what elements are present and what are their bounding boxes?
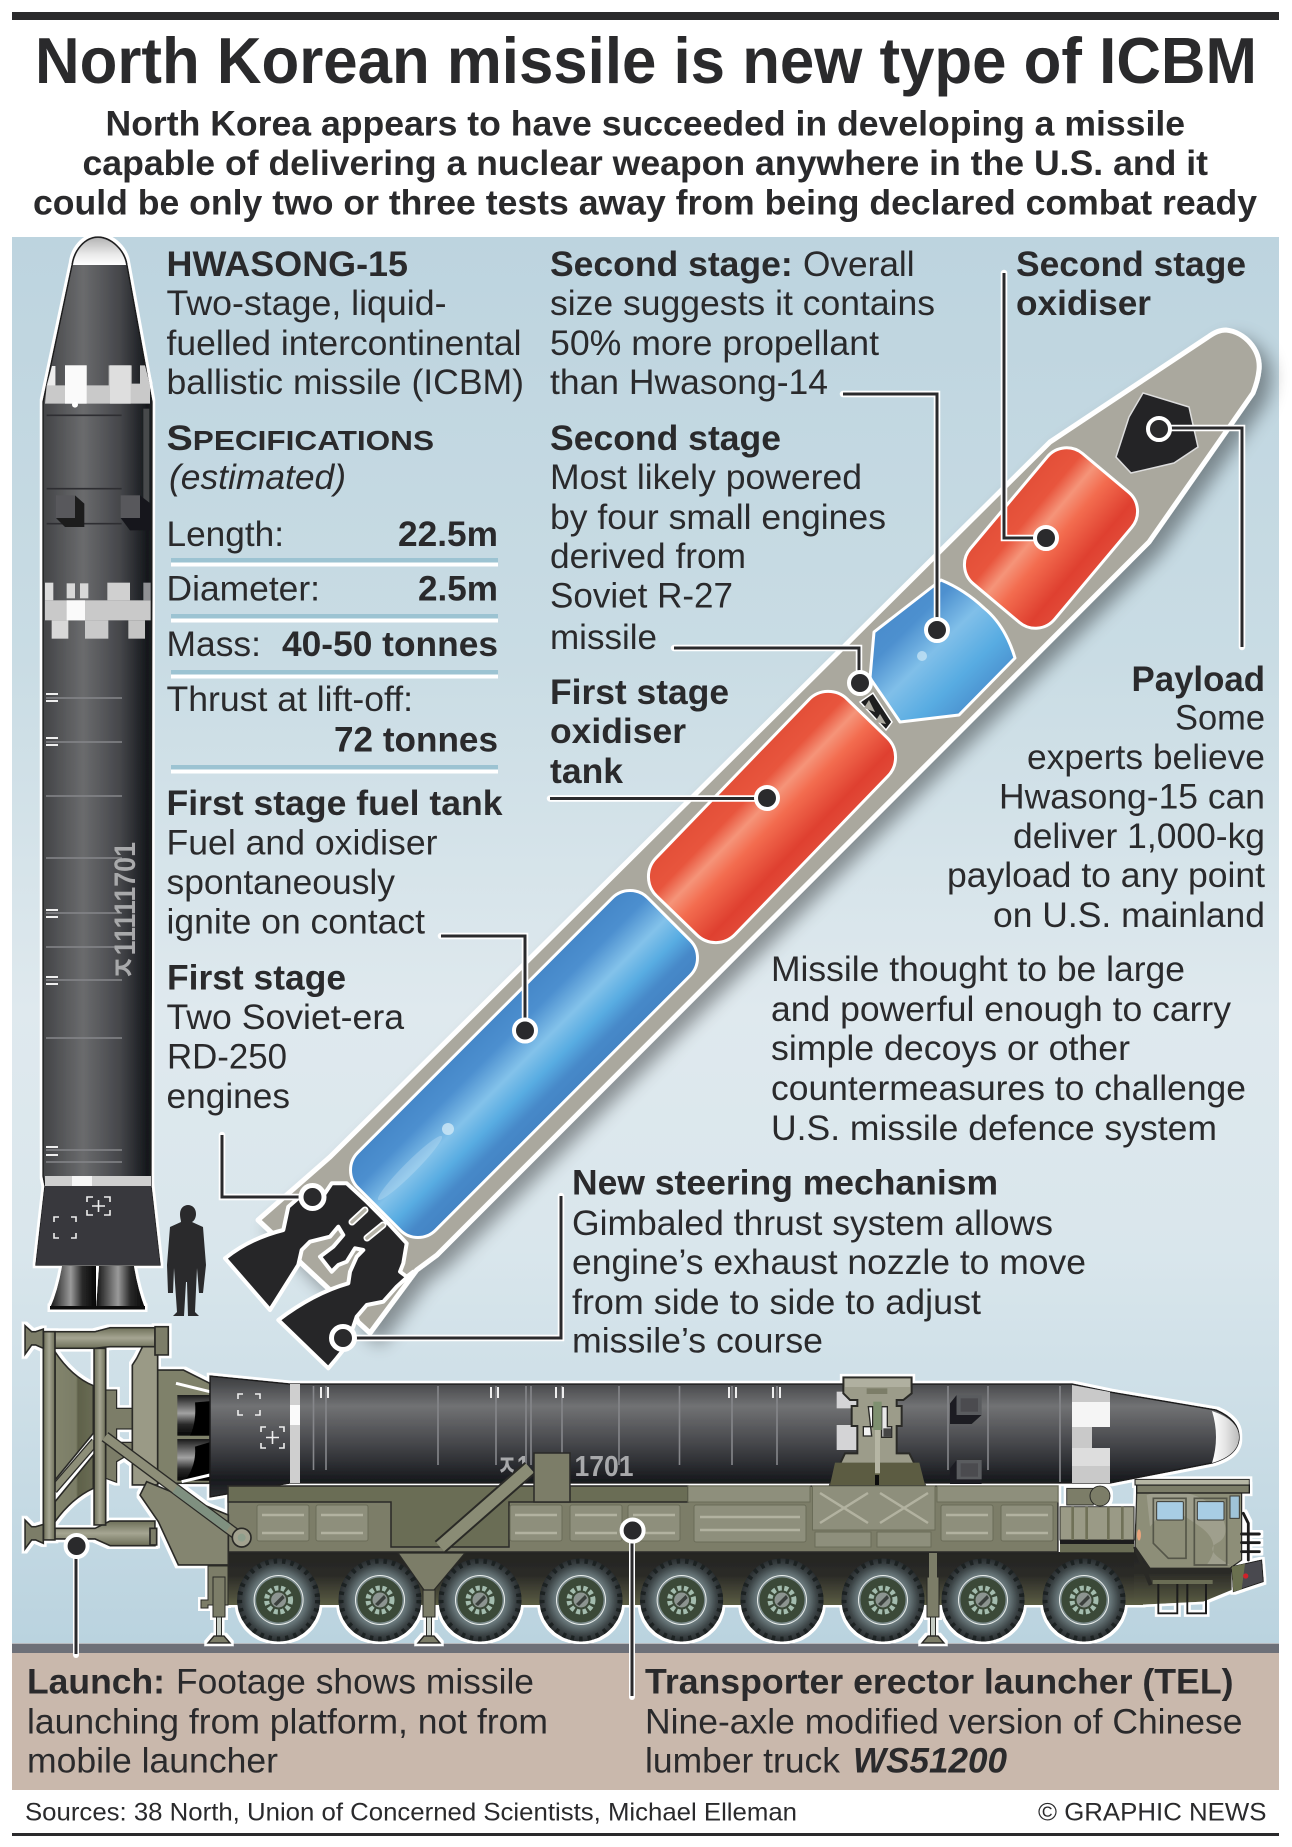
cab windows xyxy=(1157,1496,1239,1520)
right side strip xyxy=(143,409,149,505)
text: first stage xyxy=(166,958,405,1116)
dark deck recess xyxy=(228,1486,688,1547)
interstage band xyxy=(45,583,151,639)
nose cap xyxy=(73,238,126,265)
leader: payload xyxy=(1148,418,1242,647)
text: decoys note: simple decoys or other xyxy=(771,1029,1130,1068)
alignment marks xyxy=(54,1197,110,1238)
rear wedge and ram xyxy=(105,1437,251,1565)
lower block xyxy=(950,1460,982,1484)
text: new steering mechanism: New steering mechanism xyxy=(572,1163,998,1202)
second stage small engines xyxy=(860,693,892,730)
control block left xyxy=(56,495,84,527)
leader: new steering mechanism xyxy=(332,1196,561,1350)
platform mid upright xyxy=(94,1348,106,1525)
text: payload: Some xyxy=(1175,698,1265,737)
text: first stage oxidiser tank: First stage xyxy=(550,673,729,712)
leader: TEL xyxy=(622,1520,644,1697)
platform left upright xyxy=(43,1332,55,1540)
text: second stage engines: derived from xyxy=(550,537,746,576)
text: first stage: RD-250 xyxy=(167,1037,287,1076)
text: decoys note: and powerful enough to carry xyxy=(771,990,1232,1029)
rear chassis step xyxy=(201,1566,228,1608)
leader: first stage fuel tank xyxy=(441,936,536,1042)
panel: illustrated background xyxy=(12,237,1279,1643)
spec: mass: 40-50 tonnes xyxy=(282,625,498,664)
sources: Sources: 38 North, Union of Concerned Scientists, Michael Elleman xyxy=(25,1798,797,1826)
launch platform xyxy=(25,1326,210,1549)
text: TEL caption: Transporter erector launcher (TEL) xyxy=(645,1662,1234,1701)
subtitle xyxy=(33,104,1258,222)
text: launch caption: mobile launcher xyxy=(27,1741,278,1780)
text: first stage fuel tank xyxy=(166,784,503,941)
elevating ram xyxy=(105,1437,242,1538)
text: payload xyxy=(947,660,1265,935)
ground strip xyxy=(12,1644,1279,1653)
text: launch caption: launching from platform, not from xyxy=(27,1702,548,1741)
platform right beam xyxy=(132,1345,158,1485)
text: first stage fuel tank: ignite on contact xyxy=(166,902,425,941)
rocket nozzles xyxy=(50,1266,145,1310)
subtitle: capable of delivering a nuclear weapon anywhere in the U.S. and it xyxy=(82,144,1208,183)
cab lower chassis xyxy=(1134,1547,1232,1605)
text: payload: Payload xyxy=(1132,660,1265,699)
erector strut xyxy=(440,1453,570,1547)
text: first stage oxidiser tank xyxy=(550,673,729,791)
text: payload: experts believe xyxy=(1027,738,1265,777)
white squares behind cradle xyxy=(837,1392,858,1450)
diagonal cutaway missile xyxy=(225,330,1259,1368)
cradle bracket xyxy=(830,1377,925,1485)
base flare xyxy=(36,1186,160,1265)
top rule xyxy=(12,12,1279,20)
spec: mass: Mass: xyxy=(166,625,261,664)
side lamp xyxy=(1137,1529,1141,1541)
serial number horizontal xyxy=(497,1451,634,1483)
text: second stage engines: Most likely powered xyxy=(550,458,862,497)
control block right xyxy=(121,495,151,530)
white base band xyxy=(45,1176,151,1186)
text: new steering mechanism: from side to side to adjust xyxy=(572,1283,981,1322)
spec: thrust: Thrust at lift-off: xyxy=(166,680,413,719)
transporter erector launcher with missile xyxy=(25,1326,1263,1643)
subtitle: could be only two or three tests away from being declared combat ready xyxy=(33,183,1258,222)
text: second stage propellant: Overall xyxy=(803,245,915,284)
cab roof xyxy=(1135,1479,1249,1493)
leader: second stage oxidiser xyxy=(1004,273,1057,549)
spec: thrust xyxy=(166,680,498,759)
missile serial number: ㅈ11111701 xyxy=(109,842,142,980)
spec: thrust: 72 tonnes xyxy=(334,720,498,759)
second stage fuel tank xyxy=(870,580,1015,722)
upper block xyxy=(950,1395,982,1424)
text: first stage: Two Soviet-era xyxy=(166,998,405,1037)
platform connector xyxy=(106,1390,132,1482)
cab front frame xyxy=(1135,1547,1151,1585)
first stage oxidiser tank xyxy=(637,680,907,954)
missile nozzles on launcher xyxy=(176,1383,212,1482)
text: second stage oxidiser: oxidiser xyxy=(1016,284,1151,323)
credit: © GRAPHIC NEWS xyxy=(1038,1798,1266,1826)
chassis xyxy=(208,1552,1143,1605)
text: second stage oxidiser: Second stage xyxy=(1016,245,1246,284)
text: first stage oxidiser tank: oxidiser xyxy=(550,712,686,751)
estimated note: (estimated) xyxy=(169,458,346,497)
white tick marks xyxy=(46,694,58,1155)
white base band horizontal xyxy=(290,1384,300,1483)
text: second stage propellant: Second stage: xyxy=(550,245,793,284)
cab doors xyxy=(1153,1498,1227,1565)
second stage oxidiser tank xyxy=(954,438,1148,638)
tank highlights xyxy=(374,651,927,1204)
cab camouflage xyxy=(1147,1491,1230,1565)
cab grill xyxy=(1242,1513,1259,1560)
support legs xyxy=(208,1553,944,1643)
text: launch caption xyxy=(27,1662,548,1780)
text: first stage: engines xyxy=(166,1077,290,1116)
specifications table xyxy=(166,419,498,774)
truck deck body xyxy=(228,1486,1058,1552)
text: Hwasong-15 description: HWASONG-15 xyxy=(166,245,408,284)
text: decoys note: U.S. missile defence system xyxy=(771,1109,1217,1148)
text: first stage fuel tank: First stage fuel tank xyxy=(166,784,503,823)
platform lower trumpet xyxy=(55,1455,93,1522)
text: Hwasong-15 description: ballistic missile (ICBM) xyxy=(166,363,524,402)
subtitle: North Korea appears to have succeeded in developing a missile xyxy=(106,104,1185,143)
vertical Hwasong-15 missile xyxy=(36,237,160,1310)
body panels xyxy=(257,1486,1058,1547)
text: payload: Hwasong-15 can xyxy=(999,777,1265,816)
text: decoys note: Missile thought to be large xyxy=(771,950,1185,989)
specifications heading: SPECIFICATIONS xyxy=(166,419,434,458)
mid engine section xyxy=(1060,1486,1134,1552)
stage ring lines xyxy=(46,698,122,1162)
text: launch caption: Launch: xyxy=(27,1662,165,1701)
bottom rule xyxy=(12,1833,1279,1836)
engine plumbing slots xyxy=(352,1210,383,1238)
missile nose cap xyxy=(1212,1411,1239,1463)
platform rear box xyxy=(158,1370,210,1483)
platform end caps xyxy=(25,1326,168,1549)
leader: second stage propellant xyxy=(843,394,948,641)
spec: length: 22.5m xyxy=(398,515,498,554)
spec: length: Length: xyxy=(166,515,284,554)
missile control blocks horizontal xyxy=(830,1377,982,1485)
text: TEL caption: lumber truck xyxy=(645,1741,840,1780)
text: TEL caption xyxy=(645,1662,1242,1780)
platform cross struts xyxy=(53,1442,95,1490)
human scale figure xyxy=(167,1205,206,1316)
text: launch caption: Footage shows missile xyxy=(176,1662,534,1701)
truck cabin and engine section xyxy=(1060,1479,1263,1613)
text: new steering mechanism: engine’s exhaust nozzle to move xyxy=(572,1243,1086,1282)
text: first stage fuel tank: spontaneously xyxy=(166,863,395,902)
text: second stage propellant: 50% more propellant xyxy=(550,324,879,363)
rear wedge xyxy=(140,1482,228,1565)
spec: diameter: 2.5m xyxy=(418,569,498,608)
text: new steering mechanism: missile’s course xyxy=(572,1321,823,1360)
text: second stage propellant: than Hwasong-14 xyxy=(550,363,828,402)
leader: first stage engines xyxy=(222,1135,324,1208)
spec: mass xyxy=(166,625,498,664)
serial number horizontal: ㅈ1 xyxy=(497,1451,529,1483)
spec: diameter: Diameter: xyxy=(166,569,320,608)
missile body xyxy=(36,237,160,1265)
text: second stage engines xyxy=(550,419,886,657)
platform top bar xyxy=(43,1328,155,1348)
text: first stage: First stage xyxy=(167,958,346,997)
missile nose band xyxy=(1072,1385,1110,1483)
front bumper xyxy=(1232,1560,1263,1592)
title: North Korean missile is new type of ICBM xyxy=(35,24,1257,97)
cab body xyxy=(1135,1493,1242,1568)
platform trumpet plate xyxy=(55,1352,93,1480)
text: second stage oxidiser xyxy=(1016,245,1246,323)
text: Hwasong-15 description: Two-stage, liquid- xyxy=(166,284,446,323)
platform bottom bar xyxy=(43,1521,155,1546)
alignment marks horizontal xyxy=(238,1394,284,1448)
spec: length xyxy=(166,515,498,554)
nose band xyxy=(45,365,150,408)
missile body horizontal xyxy=(210,1376,1239,1497)
text: payload: on U.S. mainland xyxy=(993,896,1265,935)
cab steps xyxy=(1153,1580,1213,1613)
text: decoys note: countermeasures to challenge xyxy=(771,1069,1246,1108)
ring lines upper xyxy=(47,415,122,524)
text: second stage propellant: size suggests it contains xyxy=(550,284,935,323)
panel: bottom caption band xyxy=(12,1653,1279,1790)
text: first stage fuel tank: Fuel and oxidiser xyxy=(166,823,438,862)
first stage engines xyxy=(225,1183,413,1368)
text: second stage propellant xyxy=(550,245,935,402)
text: Hwasong-15 description: fuelled intercontinental xyxy=(166,324,522,363)
leader: second stage engines xyxy=(674,648,871,694)
text: decoys note xyxy=(771,950,1246,1148)
leader: launch xyxy=(66,1535,88,1655)
payload warhead xyxy=(1116,393,1198,473)
upper stage details, zoom-coordinate group xyxy=(45,365,151,639)
text: payload: deliver 1,000-kg xyxy=(1013,817,1265,856)
text: new steering mechanism: Gimbaled thrust system allows xyxy=(572,1204,1053,1243)
text: first stage oxidiser tank: tank xyxy=(550,752,624,791)
axle wheels xyxy=(237,1558,1126,1642)
text: second stage engines: missile xyxy=(550,618,657,657)
text: payload: payload to any point xyxy=(947,856,1265,895)
missile casing xyxy=(258,330,1259,1333)
first stage fuel tank xyxy=(340,880,708,1248)
stage ring lines horizontal xyxy=(314,1386,1060,1482)
spec: diameter xyxy=(166,569,498,608)
serial number horizontal: 1701 xyxy=(574,1451,634,1483)
text: second stage engines: Soviet R-27 xyxy=(550,576,733,615)
text: Hwasong-15 description xyxy=(166,245,524,402)
text: second stage engines: Second stage xyxy=(550,419,781,458)
text: new steering mechanism xyxy=(572,1163,1086,1360)
text: TEL caption: Nine-axle modified version of Chinese xyxy=(645,1702,1242,1741)
white ticks horizontal xyxy=(321,1387,780,1398)
leader: first stage oxidiser xyxy=(550,787,778,809)
text: second stage engines: by four small engines xyxy=(550,498,886,537)
text: TEL caption: WS51200 xyxy=(853,1741,1008,1780)
